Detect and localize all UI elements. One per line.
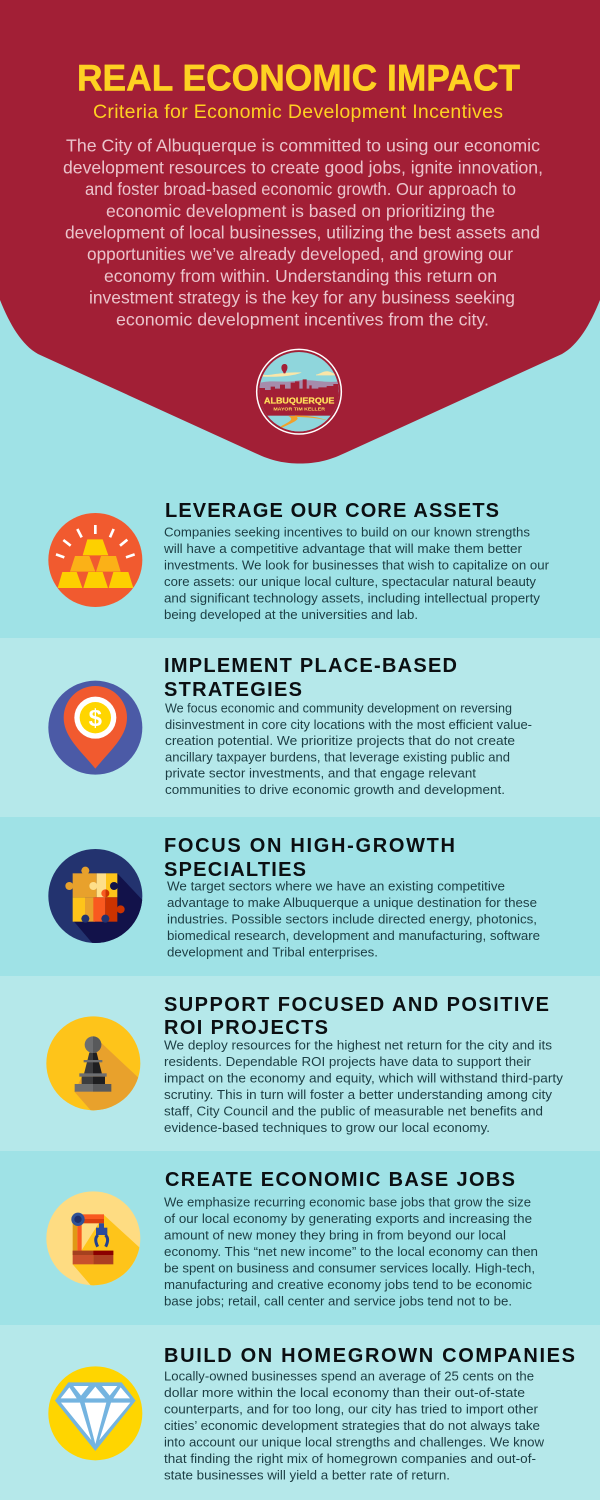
body text (167, 878, 540, 960)
intro paragraph: development of local businesses, utilizing the best assets and (65, 222, 540, 242)
heading: CREATE ECONOMIC BASE JOBS (165, 1169, 515, 1191)
body text: staff, City Council and the public of measurable net benefits and (164, 1104, 543, 1118)
body text: manufacturing and creative economy jobs tend to be economic (164, 1277, 533, 1292)
heading: SPECIALTIES (164, 859, 306, 881)
intro paragraph: and foster broad-based economic growth. Our approach to (85, 179, 516, 199)
body text: evidence-based techniques to grow our local economy. (164, 1120, 490, 1135)
body text: We deploy resources for the highest net return for the city and its (164, 1038, 553, 1052)
body text: industries. Possible sectors include directed energy, photonics, (167, 912, 537, 926)
body text: into account our unique local strengths and challenges. We know (164, 1434, 545, 1450)
body text: being developed at the universities and lab. (164, 607, 418, 622)
intro paragraph: development resources to create good jobs, ignite innovation, (63, 157, 543, 177)
heading: ROI PROJECTS (164, 1017, 328, 1039)
panel: support focused and positive ROI projects (46, 994, 564, 1135)
heading: FOCUS ON HIGH-GROWTH (164, 835, 455, 857)
body text: be spent on business and consumer services locally. High-tech, (164, 1260, 535, 1276)
body text (164, 1038, 564, 1135)
heading: SUPPORT FOCUSED AND POSITIVE (164, 994, 549, 1016)
body text: disinvestment in core city locations with the most efficient value- (165, 717, 532, 732)
panel: header banner (0, 0, 600, 464)
logo: Albuquerque Mayor Tim Keller: MAYOR TIM KELLER (273, 407, 326, 412)
title: REAL ECONOMIC IMPACT (77, 58, 520, 98)
panel: leverage our core assets (48, 500, 550, 622)
logo: Albuquerque Mayor Tim Keller (257, 349, 343, 435)
body text: and significant technology assets, including intellectual property (164, 591, 541, 606)
body text: creation potential. We prioritize projects that do not create (165, 733, 515, 748)
icon: balloon (281, 364, 287, 373)
body text: investments. We look for businesses that wish to capitalize on our (164, 558, 550, 573)
body text: that finding the right mix of homegrown companies and out-of- (164, 1451, 536, 1466)
panel: implement place-based strategies (48, 655, 532, 797)
icon: puzzle (48, 849, 143, 947)
heading: STRATEGIES (164, 679, 302, 701)
body text: economy. This “net new income” to the local economy can then (164, 1244, 538, 1259)
body text: core assets: our unique local culture, spectacular natural beauty (164, 574, 536, 589)
body text: of our local economy by generating exports and increasing the (164, 1211, 532, 1226)
heading (164, 655, 457, 701)
body text: biomedical research, development and manufacturing, software (167, 928, 540, 943)
icon: diamond (48, 1366, 142, 1460)
icon: chess pawn (46, 1016, 140, 1113)
intro paragraph (63, 136, 543, 329)
panel: create economic base jobs (46, 1169, 538, 1308)
body text: We emphasize recurring economic base jobs that grow the size (164, 1194, 531, 1210)
icon: gold bars (48, 513, 142, 607)
body text: residents. Dependable ROI projects have data to support their (164, 1054, 532, 1069)
body text: development and Tribal enterprises. (167, 944, 378, 960)
panel: focus on high-growth specialties (48, 835, 540, 960)
body text: state businesses will yield a better rate of return. (164, 1468, 450, 1482)
body text: scrutiny. This in turn will foster a better understanding among city (164, 1087, 553, 1102)
body text (165, 700, 532, 797)
intro paragraph: opportunities we’ve already developed, and growing our (87, 244, 513, 264)
body text: will have a competitive advantage that will make them better (163, 541, 523, 556)
body text: cities’ economic development strategies that do not always take (164, 1418, 540, 1433)
body text: amount of new money they bring in from beyond our local (164, 1228, 506, 1242)
body text: impact on the economy and equity, which will withstand third-party (164, 1070, 564, 1086)
icon: robot arm (46, 1191, 140, 1288)
intro paragraph: economic development is based on prioritizing the (106, 201, 495, 221)
icon: location pin with dollar (48, 681, 142, 775)
body text: private sector investments, and that engage relevant (165, 766, 476, 781)
intro paragraph: economy from within. Understanding this return on (104, 266, 497, 286)
subtitle: Criteria for Economic Development Incentives (93, 101, 503, 123)
heading: BUILD ON HOMEGROWN COMPANIES (164, 1345, 575, 1367)
body text: We focus economic and community development on reversing (165, 700, 512, 716)
heading: IMPLEMENT PLACE-BASED (164, 655, 457, 677)
heading (164, 835, 455, 881)
icon: location pin with dollar: $ (89, 705, 102, 732)
body text: communities to drive economic growth and development. (165, 782, 505, 797)
body text (164, 1194, 538, 1308)
body text: dollar more within the local economy than their out-of-state (164, 1385, 525, 1400)
body text: We target sectors where we have an existing competitive (167, 878, 505, 894)
heading (164, 994, 549, 1039)
body text (164, 1368, 545, 1482)
body text: counterparts, and for too long, our city has tried to import other (164, 1402, 539, 1416)
intro paragraph: investment strategy is the key for any business seeking (89, 288, 515, 308)
body text (163, 525, 550, 622)
heading: LEVERAGE OUR CORE ASSETS (165, 500, 499, 522)
logo: Albuquerque Mayor Tim Keller: ALBUQUERQUE (264, 395, 335, 405)
intro paragraph: economic development incentives from the city. (116, 309, 489, 329)
body text: base jobs; retail, call center and service jobs tend not to be. (164, 1294, 512, 1308)
body text: advantage to make Albuquerque a unique destination for these (167, 895, 537, 910)
panel: build on homegrown companies (48, 1345, 575, 1482)
body text: Companies seeking incentives to build on our known strengths (164, 525, 531, 540)
intro paragraph: The City of Albuquerque is committed to using our economic (66, 136, 540, 156)
body text: Locally-owned businesses spend an average of 25 cents on the (164, 1368, 534, 1384)
body text: ancillary taxpayer burdens, that leverage existing public and (165, 749, 510, 764)
